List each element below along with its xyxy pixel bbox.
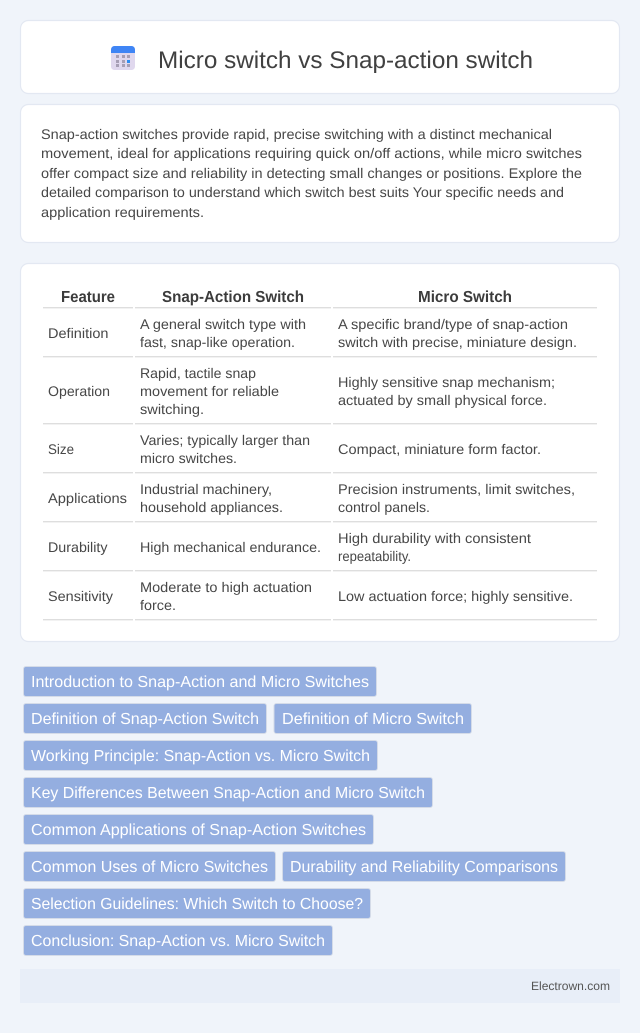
tag: conclusion: [24, 926, 332, 956]
table header row: Micro Switch: [418, 289, 512, 306]
row: applications: Precision instruments, limit switches,: [338, 481, 575, 497]
tag: conclusion: Conclusion: Snap-Action vs. Micro Switch: [31, 933, 325, 950]
row: applications: [48, 481, 575, 515]
footer: Electrown.com: [531, 979, 610, 993]
row: definition: Definition: [48, 325, 108, 341]
row: durability: [48, 530, 531, 564]
panel: comparison table: [20, 264, 620, 642]
tag: common applications: [24, 814, 374, 844]
tag: key differences: [24, 778, 432, 808]
tag: durability and reliability: [282, 852, 566, 882]
text block: intro paragraph: Snap-action switches provide rapid, precise switching with a distinct mechanical: [41, 126, 552, 142]
icon: calendar grid: [111, 46, 135, 70]
table header row: Snap-Action Switch: [162, 289, 304, 306]
row: applications: household appliances.: [140, 499, 283, 515]
row: durability: repeatability.: [338, 548, 411, 564]
panel: introduction: [20, 104, 620, 242]
row: definition: fast, snap-like operation.: [140, 334, 295, 350]
tag: common applications: Common Applications of Snap-Action Switches: [31, 822, 366, 839]
tag: definition of snap-action switch: Definition of Snap-Action Switch: [31, 711, 259, 728]
row: sensitivity: force.: [140, 597, 176, 613]
tag: key differences: Key Differences Between Snap-Action and Micro Switch: [31, 785, 425, 802]
row: definition: [48, 316, 577, 350]
row: size: [48, 432, 541, 466]
tag: working principle: [24, 740, 378, 770]
row: size: Varies; typically larger than: [140, 432, 310, 448]
title: Micro switch vs Snap-action switch: [158, 47, 533, 74]
row: sensitivity: [48, 579, 573, 613]
row: operation: movement for reliable: [140, 383, 279, 399]
row: operation: switching.: [140, 401, 204, 417]
table header row: Feature: [61, 289, 115, 306]
tag: definition of snap-action switch: [24, 704, 266, 734]
text block: intro paragraph: application requirements.: [41, 204, 204, 220]
row: operation: Operation: [48, 383, 110, 399]
row: sensitivity: Low actuation force; highly sensitive.: [338, 588, 573, 604]
row: operation: Highly sensitive snap mechanism;: [338, 374, 555, 390]
row: durability: High durability with consistent: [338, 530, 531, 546]
text block: intro paragraph: [41, 126, 582, 220]
table header row: [61, 289, 512, 306]
text block: intro paragraph: detailed comparison to understand which switch best suits Your specific needs and: [41, 184, 564, 200]
tag: introduction: Introduction to Snap-Action and Micro Switches: [31, 674, 369, 691]
footer: [20, 969, 620, 1003]
tag: common uses: [24, 852, 276, 882]
row: size: Size: [48, 441, 74, 457]
row: applications: Applications: [48, 490, 127, 506]
row: operation: actuated by small physical force.: [338, 392, 547, 408]
tag: introduction: [24, 666, 376, 696]
row: applications: control panels.: [338, 499, 430, 515]
text block: intro paragraph: movement, ideal for applications requiring quick on/off actions, while micro switches: [41, 145, 582, 161]
row: applications: Industrial machinery,: [140, 481, 272, 497]
row: definition: switch with precise, miniature design.: [338, 334, 577, 350]
tag: definition of micro switch: [274, 704, 472, 734]
row: definition: A specific brand/type of snap-action: [338, 316, 568, 332]
row: operation: [48, 365, 555, 417]
tag: working principle: Working Principle: Snap-Action vs. Micro Switch: [31, 748, 370, 765]
row: sensitivity: Moderate to high actuation: [140, 579, 312, 595]
row: durability: High mechanical endurance.: [140, 539, 321, 555]
row: size: micro switches.: [140, 450, 237, 466]
tag: selection guidelines: [24, 888, 370, 918]
row: durability: Durability: [48, 539, 108, 555]
panel: topic tags: [24, 666, 566, 956]
row: sensitivity: Sensitivity: [48, 588, 113, 604]
tag: durability and reliability: Durability and Reliability Comparisons: [290, 859, 558, 876]
tag: definition of micro switch: Definition of Micro Switch: [282, 711, 464, 728]
row: size: Compact, miniature form factor.: [338, 441, 541, 457]
tag: common uses: Common Uses of Micro Switches: [31, 859, 268, 876]
row: operation: Rapid, tactile snap: [140, 365, 256, 381]
tag: selection guidelines: Selection Guidelines: Which Switch to Choose?: [31, 896, 363, 913]
row: definition: A general switch type with: [140, 316, 306, 332]
text block: intro paragraph: offer compact size and reliability in detecting small changes or positions. Explore the: [41, 165, 582, 181]
panel: header: [20, 20, 620, 94]
